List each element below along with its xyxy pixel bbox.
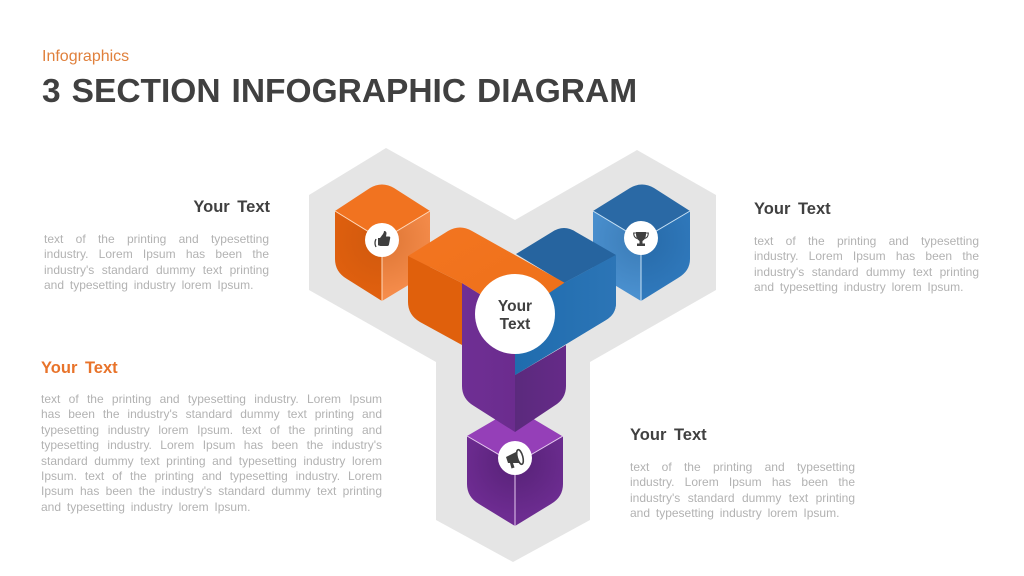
heading: middle left: Your Text	[41, 359, 118, 377]
text block: middle left: Ipsum has been the industry's standard dummy text printing	[41, 484, 382, 498]
centre circle: Text	[500, 316, 530, 333]
text block: top right: industry's standard dummy text printing	[754, 265, 979, 279]
text block: middle left	[41, 392, 382, 514]
text block: middle left: standard dummy text printing and typesetting industry lorem	[41, 454, 382, 468]
heading: top left: Your Text	[193, 198, 270, 216]
small orange cube	[335, 184, 430, 301]
text block: bottom right: text of the printing and typesetting	[630, 460, 855, 474]
heading: bottom right: Your Text	[630, 426, 707, 444]
icon: thumbs up	[365, 223, 399, 257]
text block: middle left: typesetting industry lorem Ipsum. text of the printing and	[41, 423, 382, 437]
text block: top right: text of the printing and typesetting	[754, 234, 979, 248]
text block: middle left: Ipsum. text of the printing and typesetting industry. Lorem	[41, 469, 382, 483]
big orange block	[408, 228, 565, 345]
text block: top left: industry. Lorem Ipsum has been the	[44, 247, 269, 261]
centre circle: Your	[498, 298, 532, 315]
centre circle	[475, 274, 555, 354]
big blue block	[515, 228, 616, 375]
text block: top left: and typesetting industry lorem Ipsum.	[44, 278, 253, 292]
text block: middle left: text of the printing and typesetting industry. Lorem Ipsum	[41, 392, 382, 406]
text block: middle left: typesetting industry. Lorem Ipsum has been the industry's	[41, 438, 382, 452]
text block: top right	[754, 234, 979, 294]
subtitle: Infographics	[42, 48, 129, 65]
icon: trophy	[624, 221, 658, 255]
small purple cube	[467, 408, 563, 526]
text block: top left: industry's standard dummy text printing	[44, 263, 269, 277]
text block: bottom right: and typesetting industry lorem Ipsum.	[630, 506, 839, 520]
grey background shape	[309, 148, 716, 562]
text block: middle left: and typesetting industry lorem Ipsum.	[41, 500, 250, 514]
blue flap over purple	[515, 255, 616, 375]
text block: bottom right: industry's standard dummy text printing	[630, 491, 855, 505]
text block: top left	[44, 232, 269, 292]
text block: top right: industry. Lorem Ipsum has been the	[754, 249, 979, 263]
text block: middle left: has been the industry's standard dummy text printing and	[41, 407, 382, 421]
big purple block	[462, 283, 566, 432]
icon: megaphone	[498, 441, 532, 475]
text block: top left: text of the printing and typesetting	[44, 232, 269, 246]
text block: top right: and typesetting industry lorem Ipsum.	[754, 280, 963, 294]
heading: top right: Your Text	[754, 200, 831, 218]
text block: bottom right	[630, 460, 855, 520]
title: 3 SECTION INFOGRAPHIC DIAGRAM	[42, 73, 637, 110]
text block: bottom right: industry. Lorem Ipsum has been the	[630, 475, 855, 489]
small blue cube	[593, 184, 690, 301]
